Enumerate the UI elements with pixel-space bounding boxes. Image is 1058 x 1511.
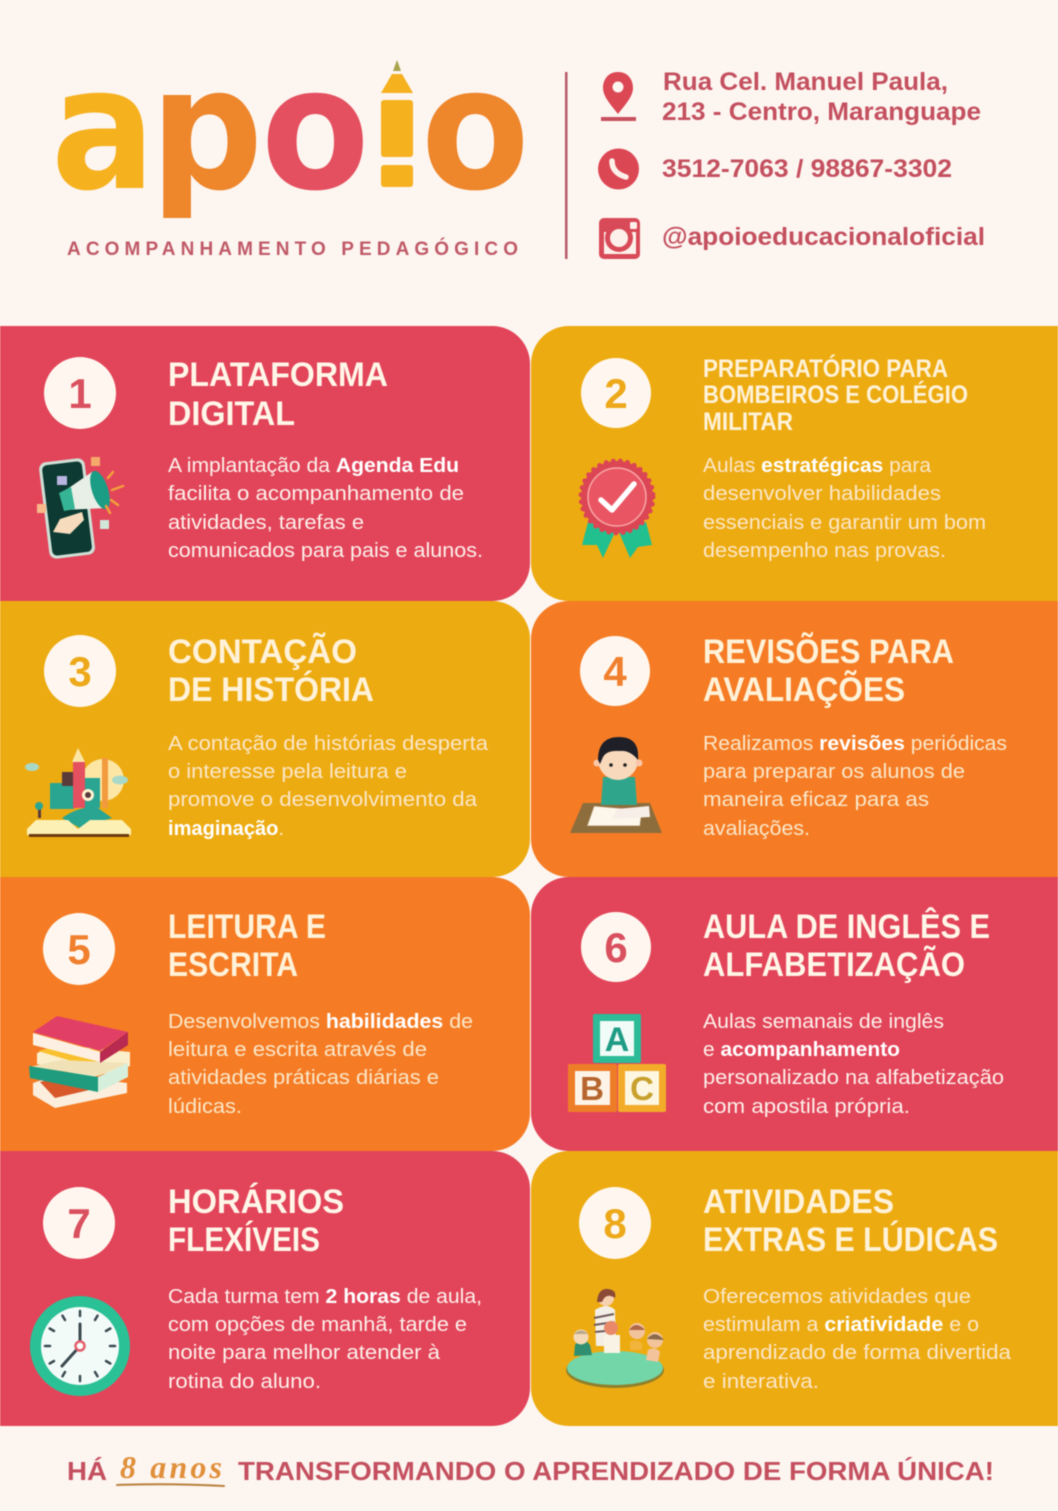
logo: apoio: o [421,31,530,228]
text block: estimulam a criatividade e o [703,1314,979,1336]
text block [703,455,986,562]
panel: 8 atividades extras [531,1151,1058,1426]
logo: apoio: p [150,31,263,228]
text block: leitura e escrita através de [168,1039,427,1061]
text block: Realizamos revisões periódicas [703,733,1007,755]
icon: storybook castle [25,748,131,837]
text block: A implantação da Agenda Edu [168,455,459,477]
heading [703,908,990,984]
icon: stack of books [29,1016,130,1108]
text block: imaginação. [168,818,284,840]
heading: HORÁRIOS [168,1183,344,1221]
heading: PREPARATÓRIO PARA [703,353,948,383]
icon: alphabet blocks: C [630,1070,654,1107]
text block: noite para melhor atender à [168,1342,441,1364]
icon: location pin [601,72,636,121]
text block [168,1286,482,1393]
panel: 6 inglês e alfabetização [531,877,1058,1151]
number 6 [581,912,651,982]
text block: facilita o acompanhamento de [168,483,464,505]
icon: alphabet blocks: B [580,1070,604,1107]
text block: Desenvolvemos habilidades de [168,1011,473,1033]
panel: 5 leitura e escrita [0,877,530,1151]
heading: CONTAÇÃO [168,633,357,671]
heading: ATIVIDADES [703,1183,894,1221]
text block: promove o desenvolvimento da [168,789,478,811]
tagline: ACOMPANHAMENTO PEDAGÓGICO [67,238,518,260]
text block: rotina do aluno. [168,1371,321,1393]
text block [703,1011,1004,1118]
heading: DE HISTÓRIA [168,671,374,709]
number 5: 5 [67,926,91,973]
heading: AVALIAÇÕES [703,671,905,709]
number 4 [580,636,650,706]
icon: phone with megaphone [37,457,123,559]
panel: 1 plataforma digital [0,326,530,601]
text block: desenvolver habilidades [703,483,941,505]
icon: clock [30,1296,130,1396]
heading: ALFABETIZAÇÃO [703,946,965,984]
heading: BOMBEIROS E COLÉGIO [703,380,968,409]
number 8: 8 [603,1200,627,1247]
icon: alphabet blocks: A [605,1021,629,1059]
address: 213 - Centro, Maranguape [662,98,981,126]
footer slogan: TRANSFORMANDO O APRENDIZADO DE FORMA ÚNICA! [238,1456,994,1486]
text block: Cada turma tem 2 horas de aula, [168,1286,482,1308]
heading: DIGITAL [168,395,295,433]
text block: atividades práticas diárias e [168,1067,439,1089]
address: Rua Cel. Manuel Paula, [663,68,948,96]
number 8 [579,1187,651,1259]
number 7: 7 [67,1200,91,1247]
text block: lúdicas. [168,1096,242,1118]
icon: alphabet blocks [568,1014,666,1112]
heading [703,353,968,436]
text block: atividades, tarefas e [168,512,364,534]
heading: AULA DE INGLÊS E [703,908,990,946]
icon: boy studying [570,737,662,833]
text block: Oferecemos atividades que [703,1286,971,1308]
heading: EXTRAS E LÚDICAS [703,1221,998,1259]
number 6: 6 [604,924,628,971]
number 2 [581,358,651,428]
number 1: 1 [68,370,92,417]
panel: 2 preparatório [531,326,1058,601]
panel: 3 contação de história [0,601,530,877]
text block: Aulas estratégicas para [703,455,932,477]
text block: A contação de histórias desperta [168,733,489,755]
logo: apoio [56,60,524,219]
text block: com opções de manhã, tarde e [168,1314,467,1336]
panel: 4 revisões [531,601,1058,877]
text block: comunicados para pais e alunos. [168,540,483,562]
divider [565,72,568,259]
heading: FLEXÍVEIS [168,1221,320,1259]
icon: pencil forming the letter i [381,60,413,187]
number 3 [44,635,116,707]
heading: REVISÕES PARA [703,633,954,671]
address [662,68,981,126]
text block: essenciais e garantir um bom [703,512,986,534]
text block [703,733,1007,840]
text block [168,733,489,840]
heading [703,633,954,709]
text block: maneira eficaz para as [703,789,929,811]
icon: instagram [599,218,640,259]
text block: o interesse pela leitura e [168,761,407,783]
text block: personalizado na alfabetização [703,1067,1004,1089]
heading [168,1183,344,1259]
icon: medal [581,461,653,558]
number 2: 2 [604,370,628,417]
text block: avaliações. [703,818,810,840]
number 3: 3 [68,648,92,695]
text block: para preparar os alunos de [703,761,965,783]
footer slogan: HÁ [67,1456,107,1486]
heading [703,1183,998,1259]
number 5 [43,913,115,985]
number 1 [44,357,116,429]
instagram handle: @apoioeducacionaloficial [662,223,985,251]
icon: phone [598,148,639,190]
icon: teacher and children on a rug [566,1289,664,1388]
heading: MILITAR [703,408,793,436]
text block: e interativa. [703,1371,819,1393]
heading [168,908,326,984]
text block [168,1011,473,1118]
handwritten 8 anos: 8 anos [120,1449,222,1485]
heading [168,356,388,433]
logo: apoio: a [51,31,155,229]
text block: aprendizado de forma divertida [703,1342,1012,1364]
text block: desempenho nas provas. [703,540,946,562]
heading: ESCRITA [168,946,298,984]
text block: e acompanhamento [703,1039,900,1061]
heading [168,633,374,709]
panel: 7 horários flexíveis [0,1151,530,1426]
text block: com apostila própria. [703,1096,910,1118]
text block [168,455,483,562]
number 4: 4 [603,648,627,695]
text block [703,1286,1012,1393]
heading: LEITURA E [168,908,326,946]
number 7 [43,1187,115,1259]
logo: apoio: o [261,31,370,228]
phone numbers: 3512-7063 / 98867-3302 [662,155,952,183]
footer slogan [67,1449,994,1486]
heading: PLATAFORMA [168,356,388,394]
text block: Aulas semanais de inglês [703,1011,944,1033]
